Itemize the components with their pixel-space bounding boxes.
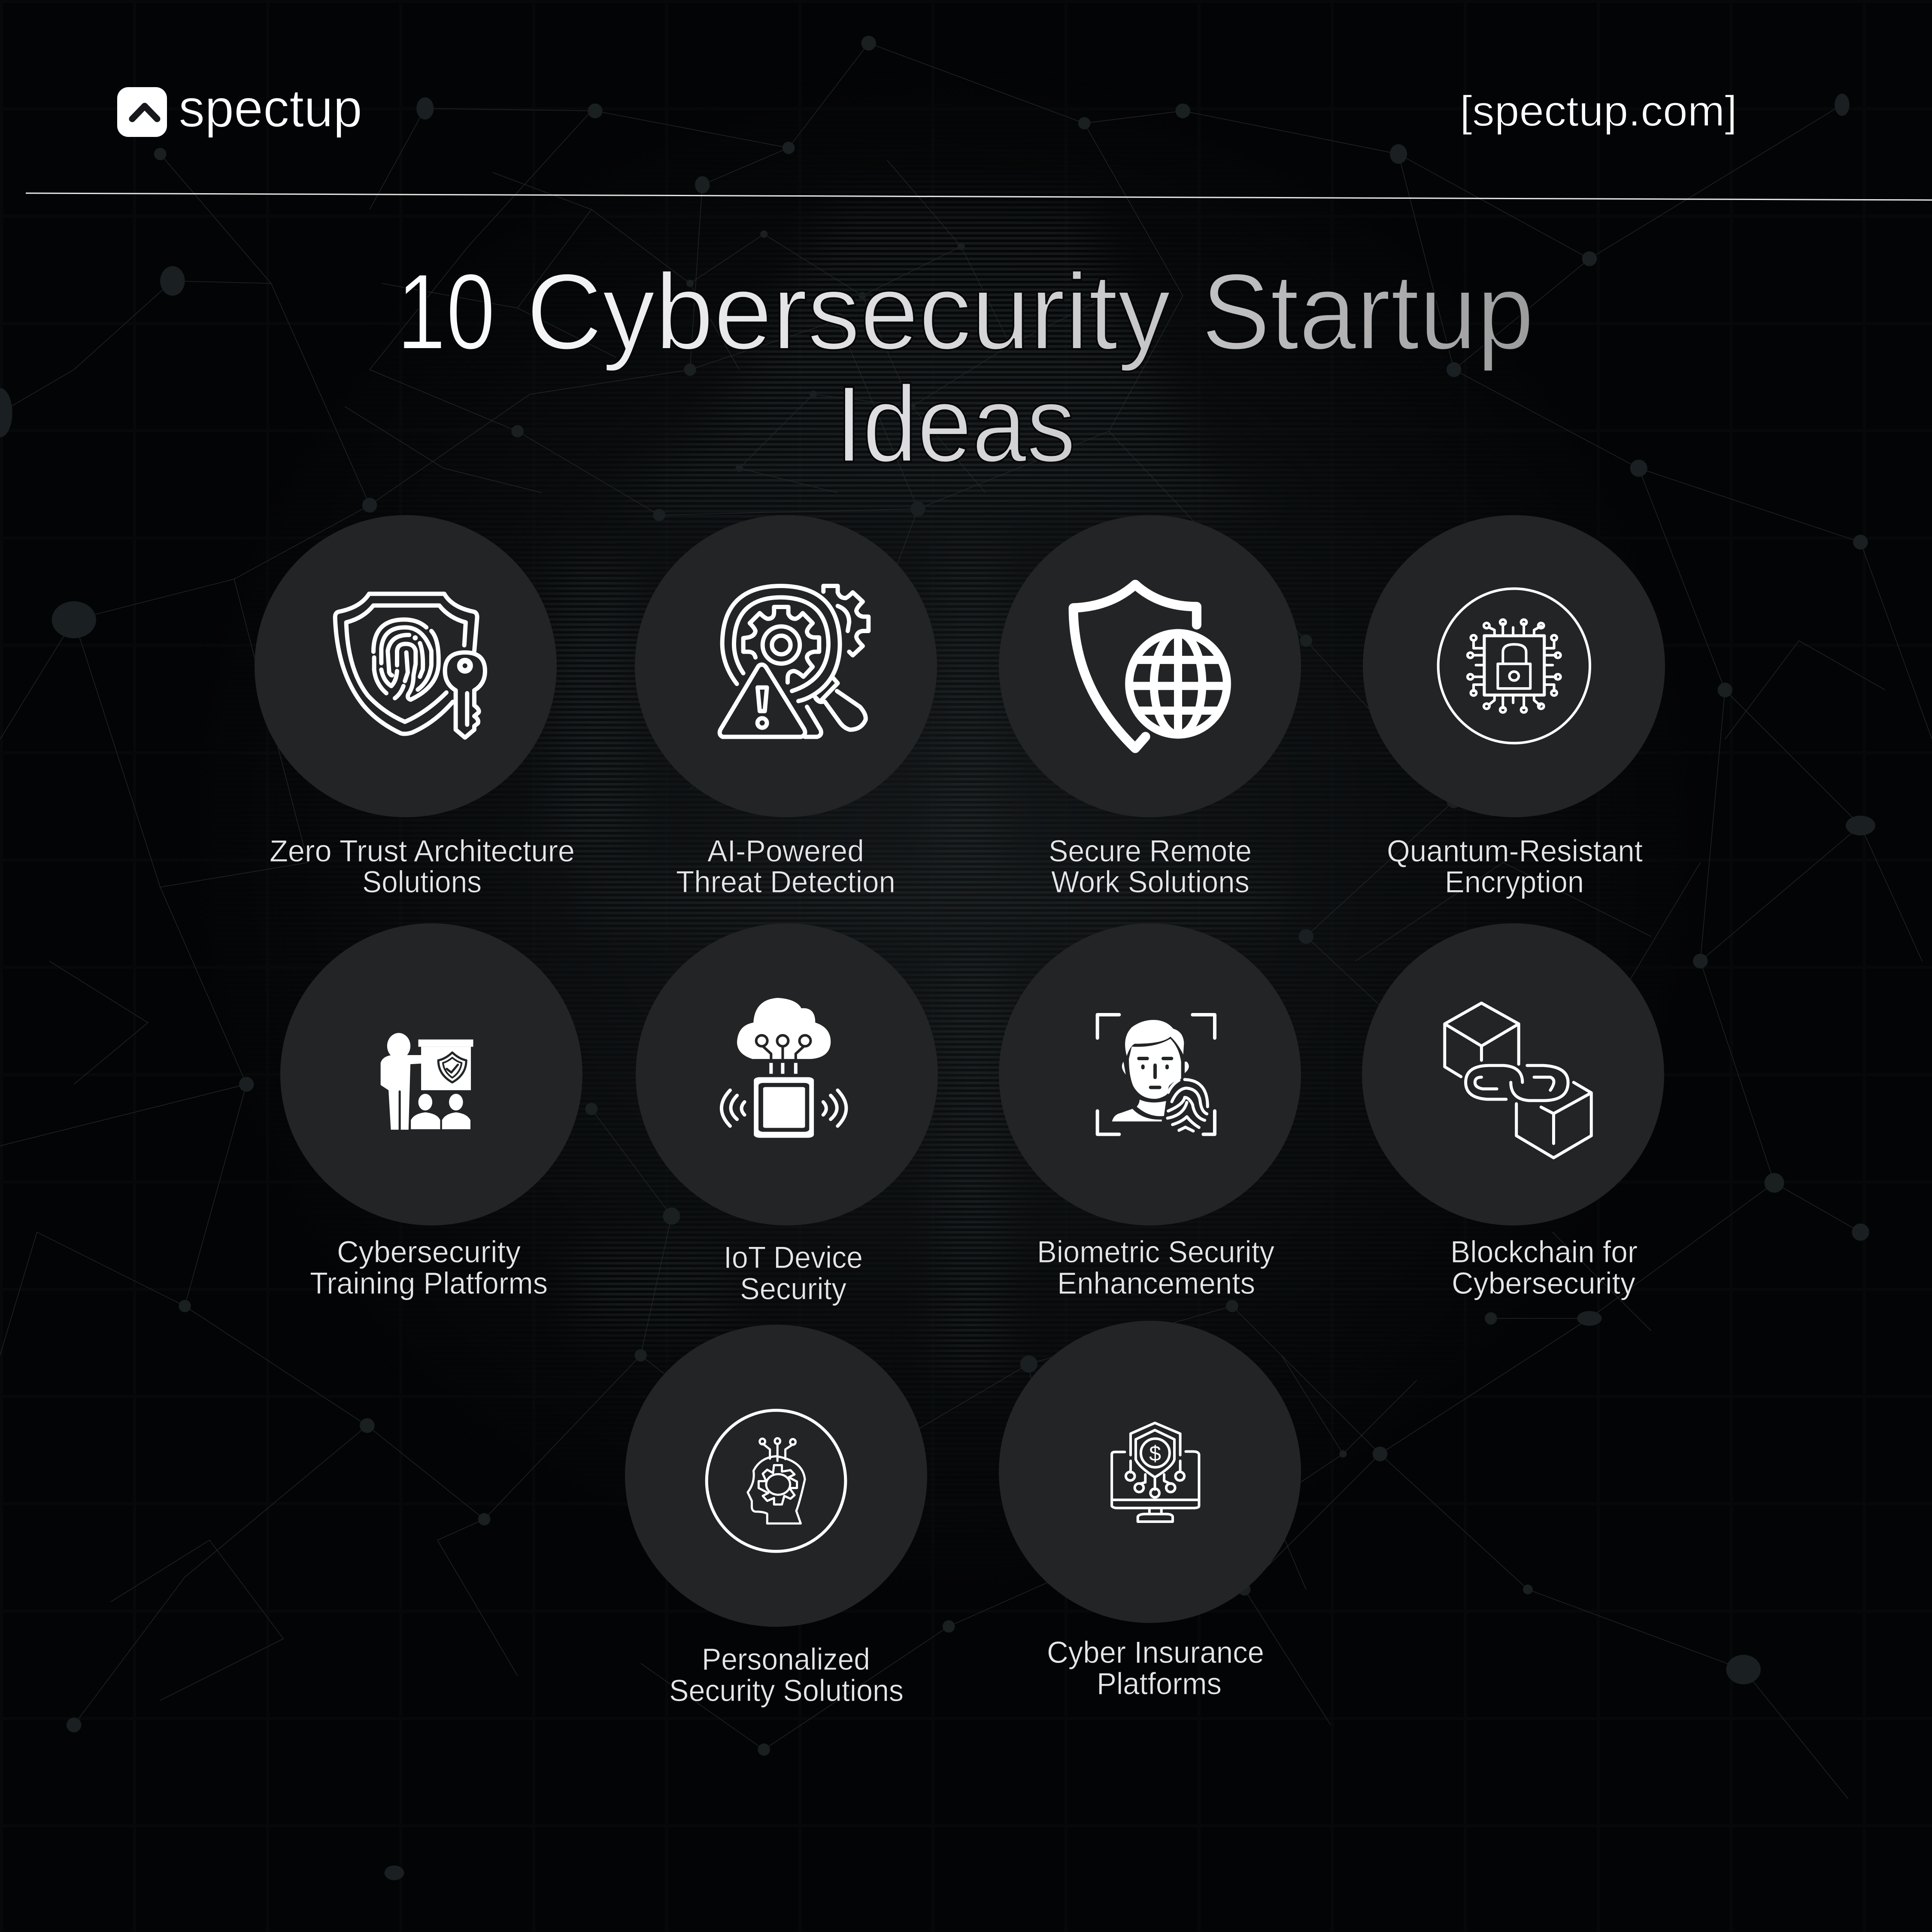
label: Secure Remote: [1049, 834, 1252, 868]
panel: Blockchain for Cybersecurity: [1362, 923, 1664, 1301]
badge circle: [635, 515, 937, 817]
panel: Quantum-Resistant Encryption: [1363, 515, 1665, 899]
badge circle: [999, 1321, 1301, 1623]
badge circle: [1363, 515, 1665, 817]
icon: head with gear in ring: [707, 1410, 846, 1551]
label: [724, 1241, 863, 1306]
label: Zero Trust Architecture: [270, 834, 575, 868]
label: Personalized: [702, 1643, 870, 1677]
label: Cybersecurity: [1452, 1267, 1635, 1301]
logo wordmark: spectup: [179, 79, 362, 138]
panel: Zero Trust Architecture Solutions: [255, 515, 575, 899]
label: [1037, 1235, 1274, 1301]
label: Encryption: [1445, 865, 1584, 899]
icon: linked blocks: [1445, 1003, 1591, 1158]
label: [669, 1643, 904, 1708]
panel: Biometric Security Enhancements: [999, 923, 1301, 1301]
badge circle: [999, 515, 1301, 817]
header: website link: [spectup.com]: [1460, 87, 1737, 135]
label: Solutions: [362, 865, 482, 899]
icon: monitor with dollar shield: [1112, 1423, 1199, 1522]
logo mark: [117, 87, 167, 137]
label: Threat Detection: [676, 865, 895, 899]
label: IoT Device: [724, 1241, 863, 1275]
panel: Personalized Security Solutions: [625, 1325, 927, 1708]
label: [1047, 1636, 1264, 1701]
label: Work Solutions: [1051, 865, 1250, 899]
title: Startup: [1201, 252, 1534, 372]
label: Security Solutions: [669, 1674, 904, 1708]
header: spectup logo: [117, 79, 362, 138]
label: Enhancements: [1057, 1267, 1255, 1301]
badge circle: [1362, 923, 1664, 1225]
label: Quantum-Resistant: [1387, 834, 1643, 868]
panel: Cyber Insurance Platforms: [999, 1321, 1301, 1701]
label: Cyber Insurance: [1047, 1636, 1264, 1670]
label: [676, 834, 895, 899]
icon: cloud and connected device: [722, 998, 846, 1138]
icon: trainer presenting shield to audience: [381, 1033, 473, 1130]
icon: magnifier gear and warning: [720, 586, 868, 737]
label: [1387, 834, 1643, 899]
icon: face scan with fingerprint: [1098, 1015, 1215, 1134]
label: Cybersecurity: [337, 1235, 521, 1269]
badge circle: [625, 1325, 927, 1627]
header divider line: [26, 193, 1932, 200]
label: [1049, 834, 1252, 899]
title: [397, 252, 1534, 485]
label: Security: [740, 1272, 846, 1306]
panel: IoT Device Security: [636, 923, 938, 1306]
icon: shield fingerprint and key: [335, 594, 485, 737]
title: Ideas: [835, 364, 1076, 485]
panel: Cybersecurity Training Platforms: [280, 923, 582, 1301]
badge circle: [255, 515, 557, 817]
label: [310, 1235, 548, 1301]
title: 10: [397, 252, 495, 372]
panel: AI-Powered Threat Detection: [635, 515, 937, 899]
panel: Secure Remote Work Solutions: [999, 515, 1301, 899]
icon: chip with padlock in ring: [1438, 588, 1590, 743]
label: [270, 834, 575, 899]
badge circle: [636, 923, 938, 1225]
label: Training Platforms: [310, 1267, 548, 1301]
label: Platforms: [1097, 1667, 1222, 1701]
icon: shield and globe: [1074, 585, 1227, 748]
label: [1450, 1235, 1638, 1301]
icon: monitor with dollar shield: $: [1149, 1441, 1161, 1465]
title: Cybersecurity: [526, 252, 1171, 372]
badge circle: [280, 923, 582, 1225]
badge circle: [999, 923, 1301, 1225]
label: AI-Powered: [707, 834, 864, 868]
label: Biometric Security: [1037, 1235, 1274, 1269]
label: Blockchain for: [1450, 1235, 1638, 1269]
